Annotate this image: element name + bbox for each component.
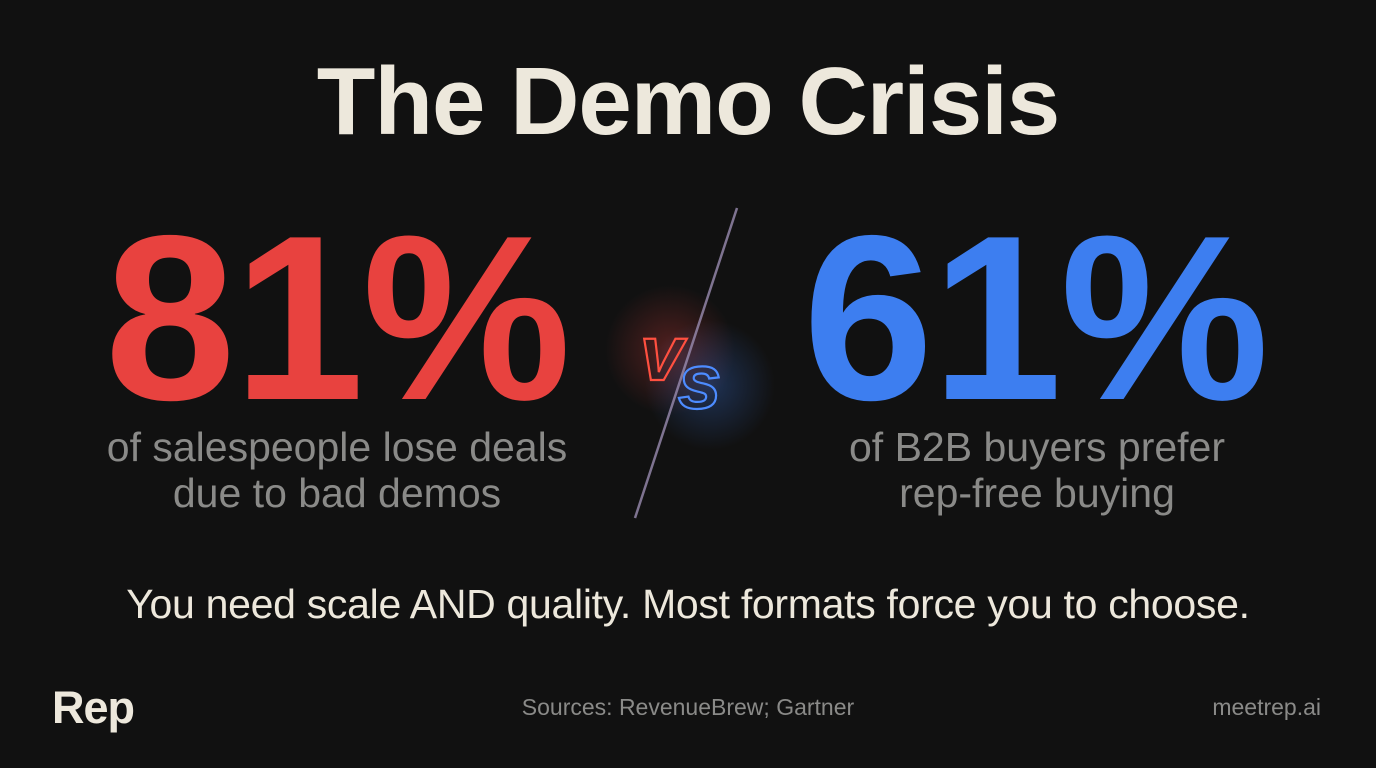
caption: buyers: rep-free buying	[899, 470, 1175, 516]
sources: Sources: RevenueBrew; Gartner	[522, 694, 854, 720]
vs divider	[614, 208, 767, 518]
stat: 61%: 61%	[803, 186, 1267, 449]
vs divider: s	[678, 337, 721, 425]
caption: salespeople	[107, 424, 567, 516]
caption: salespeople: of salespeople lose deals	[107, 424, 567, 470]
url: meetrep.ai	[1212, 694, 1321, 720]
caption: buyers	[849, 424, 1225, 516]
title: The Demo Crisis	[317, 48, 1059, 155]
vs divider: v	[640, 309, 687, 397]
stat: 81%: 81%	[105, 186, 569, 449]
caption: salespeople: due to bad demos	[173, 470, 501, 516]
logo: Rep: Rep	[52, 682, 134, 733]
caption: buyers: of B2B buyers prefer	[849, 424, 1225, 470]
tagline: You need scale AND quality. Most formats force you to choose.	[126, 581, 1250, 627]
